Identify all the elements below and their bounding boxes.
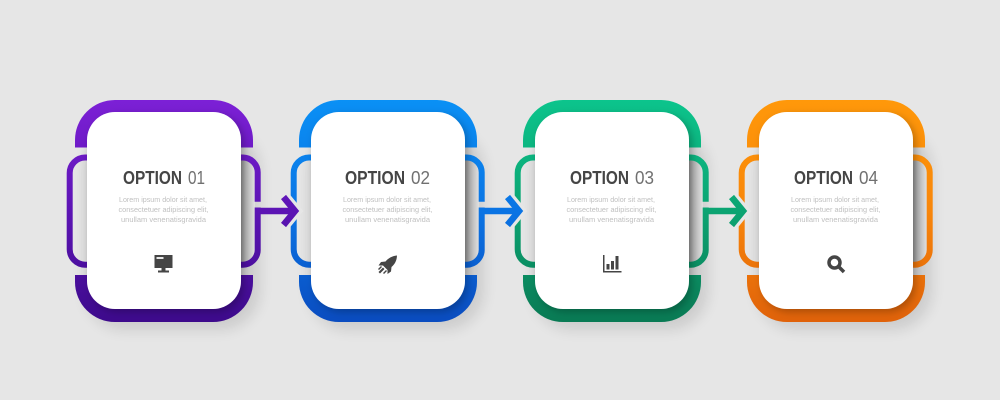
- panel: option 03: [518, 100, 708, 330]
- heading: OPTION: [794, 168, 853, 188]
- heading: 02: [411, 168, 430, 188]
- card: [759, 112, 913, 309]
- bottom cap: [75, 275, 253, 322]
- description: [790, 195, 880, 224]
- description: unullam venenatisgravida: [793, 215, 879, 224]
- description: consectetuer adipiscing elit,: [566, 205, 656, 214]
- card: [311, 112, 465, 309]
- description: [118, 195, 208, 224]
- top cap: [747, 100, 925, 148]
- description: consectetuer adipiscing elit,: [790, 205, 880, 214]
- top cap: [523, 100, 701, 148]
- inner shadow: [910, 160, 927, 262]
- card: [535, 112, 689, 309]
- description: unullam venenatisgravida: [345, 215, 431, 224]
- icon: bar chart: [603, 255, 622, 272]
- inner shadow: [462, 160, 479, 262]
- left bracket: [742, 158, 762, 265]
- inner shadow: [238, 160, 255, 262]
- right bracket: [238, 158, 258, 265]
- right bracket: [686, 158, 706, 265]
- left bracket: [518, 158, 538, 265]
- arrow: 03 to 04: [703, 197, 743, 225]
- icon: monitor: [154, 255, 172, 272]
- description: Lorem ipsum dolor sit amet,: [119, 195, 207, 204]
- icon: magnifier: [829, 257, 844, 272]
- description: [566, 195, 656, 224]
- bottom cap: [523, 275, 701, 322]
- description: consectetuer adipiscing elit,: [118, 205, 208, 214]
- right bracket: [910, 158, 930, 265]
- description: Lorem ipsum dolor sit amet,: [791, 195, 879, 204]
- heading: OPTION: [123, 168, 182, 188]
- top cap: [299, 100, 477, 148]
- panel: option 02: [294, 100, 484, 330]
- panel: option 04: [742, 100, 932, 330]
- arrow: 02 to 03: [479, 197, 519, 225]
- description: unullam venenatisgravida: [121, 215, 207, 224]
- panel: option 01: [70, 100, 260, 330]
- description: [342, 195, 432, 224]
- card: [87, 112, 241, 309]
- left bracket: [70, 158, 90, 265]
- heading: 03: [635, 168, 654, 188]
- top cap: [75, 100, 253, 148]
- right bracket: [462, 158, 482, 265]
- arrow: 01 to 02: [255, 197, 295, 225]
- heading: OPTION: [345, 168, 405, 188]
- heading: 01: [188, 168, 205, 188]
- heading: 04: [859, 168, 878, 188]
- heading: OPTION: [570, 168, 629, 188]
- bottom cap: [299, 275, 477, 322]
- bottom cap: [747, 275, 925, 322]
- description: Lorem ipsum dolor sit amet,: [567, 195, 655, 204]
- description: unullam venenatisgravida: [569, 215, 655, 224]
- inner shadow: [686, 160, 703, 262]
- description: Lorem ipsum dolor sit amet,: [343, 195, 431, 204]
- left bracket: [294, 158, 314, 265]
- icon: rocket: [378, 256, 397, 274]
- description: consectetuer adipiscing elit,: [342, 205, 432, 214]
